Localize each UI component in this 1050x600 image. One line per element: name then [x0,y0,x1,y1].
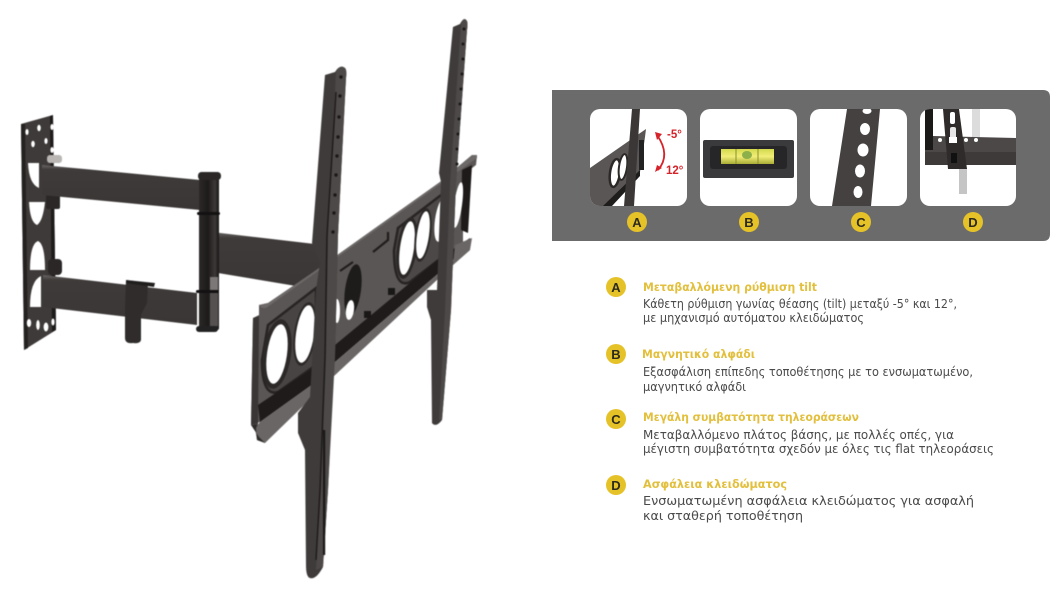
feature A text: A [611,280,621,295]
badge A [627,212,647,232]
feature D text [606,475,974,523]
product: TV wall mount [21,19,477,578]
feature A text: με μηχανισμό αυτόματου κλειδώματος [643,311,864,325]
feature D text: D [611,478,621,493]
plate holes [258,182,465,391]
left vertical bar [298,67,346,578]
feature C text: μέγιστη συμβατότητα σχεδόν με όλες τις flat τηλεοράσεις [643,442,994,456]
horizontal mounting plate [251,155,477,443]
feature B text: μαγνητικό αλφάδι [643,380,746,394]
second arm [212,232,332,292]
upper swing arm [42,165,200,210]
thumbnail A: tilt: -5° [667,129,682,141]
lower swing arm [43,275,197,325]
thumbnail A: tilt: 12° [666,165,684,177]
pivot column [196,172,221,332]
feature B text [606,344,973,394]
thumbnail D: safety lock [920,109,1016,206]
badge B: B [744,215,754,230]
badge D: D [968,215,978,230]
badge A: A [632,215,642,230]
feature A text: Κάθετη ρύθμιση γωνίας θέασης (tilt) μεταξύ -5° και 12°, [643,297,957,311]
feature C text: C [611,412,621,427]
feature C text: Μεγάλη συμβατότητα τηλεοράσεων [643,410,859,424]
badge B [739,212,759,232]
feature D text: Ασφάλεια κλειδώματος [643,477,787,491]
right vertical bar [427,19,468,425]
cable clip [125,280,155,343]
feature B text: Μαγνητικό αλφάδι [642,347,755,361]
thumbnail A: tilt [590,109,687,206]
badge C [851,212,871,232]
wall plate [21,115,62,350]
thumbnail B: magnetic level [700,109,797,206]
panel: feature thumbnails [552,90,1050,241]
badge D [963,212,983,232]
feature C text [606,409,994,456]
feature D text: και σταθερή τοποθέτηση [643,509,803,523]
feature B text: B [611,347,621,362]
thumbnail C: bracket holes [810,108,907,206]
feature B text: Εξασφάλιση επίπεδης τοποθέτησης με το ενσωματωμένο, [643,365,973,379]
feature D text: Ενσωματωμένη ασφάλεια κλειδώματος για ασφαλή [643,494,974,508]
feature A text: Μεταβαλλόμενη ρύθμιση tilt [643,280,817,294]
feature C text: Μεταβαλλόμενο πλάτος βάσης, με πολλές οπές, για [643,428,954,442]
feature A text [606,277,957,325]
badge C: C [856,215,866,230]
